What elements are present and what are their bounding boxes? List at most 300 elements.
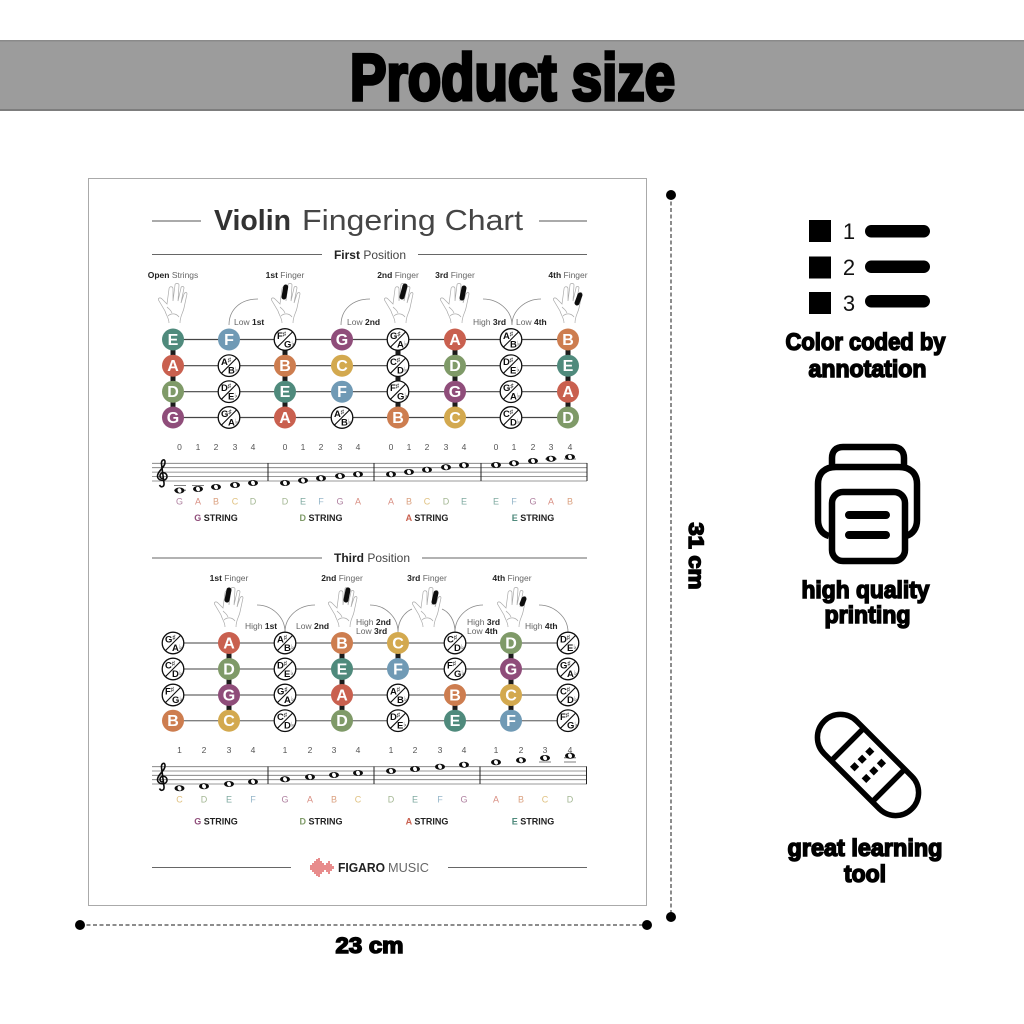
column: high 4th: G	[560, 660, 567, 672]
staff notation: first position: B	[406, 496, 412, 506]
column: open strings: B	[167, 713, 179, 730]
staff notation: third position: F	[250, 794, 256, 804]
column: low 1st: E	[228, 392, 234, 403]
column: open strings	[162, 632, 184, 732]
staff notation: first position: 1	[196, 442, 201, 452]
column: high 1st / low 2nd: ♯	[284, 634, 287, 642]
icons: hands, third position	[214, 588, 526, 627]
column: 4th finger: E	[563, 358, 574, 375]
column: low 1st: G	[221, 409, 228, 420]
staff notation: third position: 4	[251, 745, 256, 755]
column: low 2nd: G	[336, 332, 348, 349]
column: low 1st: B	[228, 366, 235, 377]
staff notation: first position: 3	[444, 442, 449, 452]
fingerboard: first position	[162, 328, 579, 428]
icon: treble clef	[158, 460, 167, 487]
column: open strings	[162, 328, 184, 428]
staff notation: third position: A	[493, 794, 499, 804]
column: low 1st: A	[221, 357, 228, 368]
column: 3rd finger: D	[449, 358, 461, 375]
column: open strings: D	[172, 669, 179, 680]
feature: great learning tool: tool	[844, 861, 886, 888]
column: high 3rd / low 4th: D	[503, 357, 510, 368]
curves and note labels: third position: High 4th	[525, 621, 558, 631]
column: 1st finger: A	[279, 410, 291, 427]
icon: sound wave	[311, 858, 333, 877]
staff notation: first position: 0	[389, 442, 394, 452]
staff notation: first position: A	[548, 496, 554, 506]
finger labels: first position: 3rd Finger	[435, 270, 475, 280]
icon: printer	[818, 447, 917, 561]
column: low 1st: ♭	[234, 393, 237, 400]
feature: color coded by annotation: Color coded by	[786, 329, 946, 356]
column: open strings: E	[168, 332, 179, 349]
column: low 1st: ♭	[235, 418, 238, 426]
column: high 1st / low 2nd: ♯	[284, 712, 287, 719]
staff notation: first position	[152, 442, 587, 523]
staff notation: third position: G STRING	[194, 816, 238, 826]
poster title: Fingering Chart	[302, 205, 523, 237]
column: high 4th: C	[560, 686, 567, 698]
column: high 1st / low 2nd: ♯	[284, 686, 288, 694]
staff notation: first position: 0	[494, 442, 499, 452]
staff notation: first position: 4	[568, 442, 573, 452]
column: 2nd finger	[387, 329, 409, 428]
column: low 2nd: A	[334, 409, 341, 420]
staff notation: third position: 2	[519, 745, 524, 755]
staff notation: third position: 3	[227, 745, 232, 755]
column: high 3rd / low 4th: ♭	[516, 367, 519, 374]
column: 3rd finger: D	[454, 643, 461, 654]
staff notation: first position: E STRING	[512, 513, 554, 523]
poster title: Violin	[214, 205, 291, 237]
staff notation: first position: 2	[531, 442, 536, 452]
staff notation: first position: C	[232, 496, 239, 506]
staff notation: first position: F	[511, 496, 517, 506]
column: 1st finger: C	[223, 713, 235, 730]
banner: product size	[0, 40, 1024, 114]
column: low 1st: A	[228, 418, 235, 428]
column: high 1st / low 2nd: ♭	[291, 696, 294, 703]
staff notation: first position: 0	[283, 442, 288, 452]
column: 4th finger: B	[562, 332, 574, 349]
finger labels: third position: 2nd Finger	[321, 573, 363, 583]
staff notation: third position: B	[331, 794, 337, 804]
finger labels: third position: 3rd Finger	[407, 573, 447, 583]
column: high 1st / low 2nd	[274, 632, 296, 732]
staff notation: third position: G	[281, 794, 289, 804]
column: 1st finger: E	[280, 384, 291, 401]
staff notation: first position: B	[567, 496, 573, 506]
column: high 3rd / low 4th: D	[510, 418, 517, 428]
column: high 1st / low 2nd: D	[277, 660, 284, 672]
column: high 4th: ♭	[574, 696, 577, 703]
column: 1st finger: ♭	[291, 340, 294, 348]
column: high 2nd / low 3rd: ♯	[397, 712, 400, 719]
column: 2nd finger: ♭	[404, 340, 407, 348]
column: 1st finger: F	[277, 331, 283, 342]
curves and note labels: third position: Low 4th	[467, 626, 498, 636]
staff notation: first position: A	[355, 496, 361, 506]
staff notation: first position: A	[195, 496, 201, 506]
column: low 1st: ♭	[235, 367, 238, 374]
column: high 3rd / low 4th: ♯	[510, 409, 513, 416]
staff notation: third position: 3	[332, 745, 337, 755]
column: low 1st: ♯	[228, 383, 231, 390]
column: open strings: A	[172, 643, 179, 654]
panel: violin fingering chart poster	[88, 178, 646, 906]
icon: numbered list: 3	[843, 291, 855, 316]
column: 4th finger: C	[505, 688, 517, 704]
column: high 4th: G	[567, 721, 574, 732]
column: 1st finger	[218, 632, 240, 732]
column: 3rd finger: G	[449, 384, 461, 401]
curves and note labels: third position: High 3rd	[467, 617, 500, 627]
staff notation: first position: F	[318, 496, 324, 506]
column: low 2nd	[331, 328, 353, 428]
icon: numbered list	[809, 219, 930, 316]
heading: third position: Third Position	[334, 551, 410, 565]
column: high 1st / low 2nd: G	[277, 686, 284, 698]
column: high 3rd / low 4th: B	[510, 340, 517, 350]
curves and note labels: third position: High 1st	[245, 621, 277, 631]
staff notation: third position: 1	[389, 745, 394, 755]
column: 1st finger: A	[223, 636, 235, 652]
column: high 4th	[557, 632, 579, 732]
finger labels: first position	[148, 270, 588, 280]
banner title: Product size	[350, 40, 675, 114]
column: 3rd finger: C	[447, 634, 454, 646]
curves and note labels: first position: Low 2nd	[347, 317, 380, 327]
column: high 2nd / low 3rd	[387, 632, 409, 732]
column: high 4th: A	[567, 669, 574, 680]
column: 4th finger: D	[505, 636, 517, 652]
column: high 2nd / low 3rd: ♭	[403, 722, 406, 729]
column: high 4th: F	[560, 712, 566, 723]
staff notation: first position: B	[213, 496, 219, 506]
staff notation: third position: 1	[494, 745, 499, 755]
column: low 1st: ♯	[228, 409, 232, 416]
finger labels: third position	[210, 573, 532, 583]
column: 3rd finger: ♯	[453, 660, 456, 668]
column: 2nd finger: A	[336, 688, 348, 704]
column: high 4th: ♯	[567, 634, 570, 642]
column: high 2nd / low 3rd: F	[393, 662, 403, 678]
column: high 2nd / low 3rd: ♯	[397, 686, 400, 694]
column: 2nd finger: F	[390, 383, 396, 394]
staff notation: first position: D	[282, 496, 289, 506]
staff notation: first position: 4	[462, 442, 467, 452]
column: 3rd finger: C	[449, 410, 461, 427]
column: high 1st / low 2nd: D	[284, 721, 291, 732]
staff notation: first position: A STRING	[406, 513, 448, 523]
column: 2nd finger: ♯	[397, 357, 400, 364]
column: high 3rd / low 4th: ♯	[510, 331, 513, 338]
column: 2nd finger: B	[392, 410, 404, 427]
column: high 1st / low 2nd: A	[284, 695, 291, 706]
staff notation: third position: 2	[308, 745, 313, 755]
staff notation: third position	[152, 745, 587, 826]
dimension: height 31 cm: 31 cm	[684, 522, 707, 590]
footer logo: figaro music	[152, 858, 587, 877]
column: 2nd finger	[331, 632, 353, 732]
column: high 3rd / low 4th: ♭	[517, 340, 520, 348]
staff notation: first position: 3	[338, 442, 343, 452]
column: 4th finger: G	[505, 662, 517, 678]
finger labels: first position: 2nd Finger	[377, 270, 419, 280]
column: 4th finger: F	[506, 713, 516, 730]
staff notation: first position: D	[443, 496, 450, 506]
staff notation: first position: 0	[177, 442, 182, 452]
column: high 4th: ♭	[574, 670, 577, 677]
staff notation: third position: 2	[413, 745, 418, 755]
dimension: width 23 cm	[75, 920, 652, 958]
staff notation: first position: 4	[251, 442, 256, 452]
staff notation: third position: E STRING	[512, 816, 554, 826]
feature: color coded by annotation: annotation	[808, 356, 926, 383]
column: open strings: D	[167, 384, 179, 401]
staff notation: first position: 2	[319, 442, 324, 452]
staff notation: third position: C	[176, 794, 183, 804]
column: high 4th: ♯	[567, 660, 571, 668]
column: 4th finger: A	[562, 384, 574, 401]
column: high 4th: D	[560, 634, 567, 646]
icon: numbered list: 1	[843, 219, 855, 244]
finger labels: third position: 4th Finger	[492, 573, 532, 583]
column: open strings: ♯	[172, 634, 176, 642]
column: open strings: A	[167, 358, 179, 375]
curves and note labels: third position: Low 2nd	[296, 621, 329, 631]
staff notation: first position: E	[300, 496, 306, 506]
column: 1st finger: G	[284, 340, 291, 350]
column: high 1st / low 2nd: ♭	[290, 670, 293, 677]
column: open strings: ♭	[179, 644, 182, 651]
column: high 3rd / low 4th: ♯	[510, 383, 514, 390]
staff notation: first position: A	[388, 496, 394, 506]
column: 2nd finger: A	[397, 340, 404, 350]
column: high 1st / low 2nd: ♯	[284, 660, 287, 668]
column: high 4th: E	[567, 643, 573, 654]
column: open strings: ♯	[171, 686, 174, 694]
column: high 4th: ♯	[566, 712, 569, 719]
icon: treble clef	[158, 763, 167, 790]
column: 3rd finger	[444, 632, 466, 732]
column: low 2nd: ♭	[348, 418, 351, 426]
column: 3rd finger: E	[450, 713, 461, 730]
column: 2nd finger: E	[337, 662, 348, 678]
column: 4th finger	[557, 328, 579, 428]
staff notation: first position: C	[424, 496, 431, 506]
icon: numbered list: 2	[843, 255, 855, 280]
staff notation: first position: D	[250, 496, 257, 506]
staff notation: third position: E	[412, 794, 418, 804]
column: high 2nd / low 3rd: D	[390, 712, 397, 723]
column: 2nd finger: D	[397, 366, 404, 377]
dimension: width 23 cm: 23 cm	[336, 933, 404, 958]
column: high 1st / low 2nd: ♭	[291, 722, 294, 729]
staff notation: third position: 3	[438, 745, 443, 755]
column: high 3rd / low 4th	[500, 329, 522, 428]
column: high 3rd / low 4th: ♭	[517, 393, 520, 400]
feature: high quality printing	[802, 447, 930, 629]
feature: great learning tool: great learning	[788, 835, 942, 862]
staff notation: first position: 1	[407, 442, 412, 452]
staff notation: third position: D	[567, 794, 574, 804]
column: high 2nd / low 3rd: E	[397, 721, 403, 732]
column: 1st finger: B	[279, 358, 291, 375]
staff notation: first position: E	[493, 496, 499, 506]
column: open strings: G	[165, 634, 172, 646]
column: 2nd finger: ♭	[404, 367, 407, 374]
column: open strings: F	[165, 686, 171, 698]
column: 2nd finger: B	[336, 636, 348, 652]
staff notation: first position: D STRING	[299, 513, 343, 523]
finger labels: first position: Open Strings	[148, 270, 198, 280]
column: 2nd finger: ♯	[397, 331, 401, 338]
curves and note labels: first position	[229, 299, 547, 327]
staff notation: third position: D	[201, 794, 208, 804]
column: high 4th: ♯	[567, 686, 570, 694]
curves and note labels: third position: Low 3rd	[356, 626, 387, 636]
staff notation: third position: A STRING	[406, 816, 448, 826]
finger labels: first position: 4th Finger	[548, 270, 588, 280]
staff notation: third position: A	[307, 794, 313, 804]
column: high 3rd / low 4th: G	[503, 383, 510, 394]
staff notation: first position: 2	[425, 442, 430, 452]
staff notation: third position: D STRING	[299, 816, 343, 826]
column: high 2nd / low 3rd: B	[397, 695, 404, 706]
column: low 1st: ♯	[228, 357, 231, 364]
column: 3rd finger	[444, 328, 466, 428]
column: 2nd finger: ♯	[396, 383, 399, 390]
column: 3rd finger: G	[454, 669, 461, 680]
column: 1st finger: D	[223, 662, 235, 678]
staff notation: third position: 1	[283, 745, 288, 755]
column: 3rd finger: A	[449, 332, 461, 349]
column: high 2nd / low 3rd: A	[390, 686, 397, 698]
staff notation: third position: C	[542, 794, 549, 804]
column: open strings: C	[165, 660, 172, 672]
feature: color coded by annotation	[786, 219, 946, 383]
column: low 2nd: ♯	[341, 409, 344, 416]
column: high 1st / low 2nd: C	[277, 712, 284, 723]
staff notation: first position: 3	[549, 442, 554, 452]
staff notation: third position: C	[355, 794, 362, 804]
column: 4th finger: D	[562, 410, 574, 427]
footer logo: figaro music: MUSIC	[388, 860, 429, 875]
staff notation: third position: B	[518, 794, 524, 804]
finger labels: third position: 1st Finger	[210, 573, 249, 583]
column: high 3rd / low 4th: E	[510, 366, 516, 377]
staff notation: third position: 2	[202, 745, 207, 755]
column: 3rd finger: ♭	[461, 670, 464, 677]
column: high 4th: D	[567, 695, 574, 706]
column: 2nd finger: ♭	[404, 393, 407, 400]
icons: hands, first position	[158, 284, 582, 323]
staff notation: third position: 3	[543, 745, 548, 755]
staff notation: third position: E	[226, 794, 232, 804]
column: low 2nd: B	[341, 418, 348, 428]
column: 1st finger: G	[223, 688, 235, 704]
column: high 4th: ♭	[574, 722, 577, 729]
staff notation: third position: D	[388, 794, 395, 804]
curves and note labels: third position: High 2nd	[356, 617, 391, 627]
feature: high quality printing: printing	[824, 602, 910, 629]
staff notation: third position: 1	[177, 745, 182, 755]
column: 2nd finger: D	[336, 713, 348, 730]
feature: great learning tool	[788, 705, 942, 888]
column: high 3rd / low 4th: ♯	[510, 357, 513, 364]
column: high 3rd / low 4th: C	[503, 409, 510, 420]
staff notation: third position: 4	[356, 745, 361, 755]
dimension: height 31 cm	[666, 190, 707, 922]
column: 2nd finger: C	[390, 357, 397, 368]
column: high 1st / low 2nd: ♭	[291, 644, 294, 651]
staff notation: third position: 4	[568, 745, 573, 755]
poster title	[152, 205, 587, 237]
column: high 2nd / low 3rd: ♭	[404, 696, 407, 703]
staff notation: first position: 4	[356, 442, 361, 452]
column: open strings: ♭	[179, 670, 182, 677]
column: high 1st / low 2nd: B	[284, 643, 291, 654]
column: high 1st / low 2nd: E	[284, 669, 290, 680]
column: high 2nd / low 3rd: C	[392, 636, 404, 652]
column: 1st finger	[274, 329, 296, 428]
curves and note labels: first position: High 3rd	[473, 317, 506, 327]
column: high 3rd / low 4th: ♭	[517, 418, 520, 426]
curves and note labels: first position: Low 4th	[516, 317, 547, 327]
column: low 2nd: F	[337, 384, 347, 401]
heading: first position: First Position	[334, 248, 406, 262]
column: low 1st	[218, 328, 240, 428]
staff notation: third position: G	[460, 794, 468, 804]
column: 3rd finger: F	[447, 660, 453, 672]
staff notation: first position: E	[461, 496, 467, 506]
feature: high quality printing: high quality	[802, 577, 930, 604]
column: 3rd finger: B	[449, 688, 461, 704]
staff notation: first position: G	[529, 496, 537, 506]
column: high 1st / low 2nd: A	[277, 634, 284, 646]
staff notation: first position: 2	[214, 442, 219, 452]
staff notation: first position: 1	[512, 442, 517, 452]
column: open strings: ♯	[172, 660, 175, 668]
column: open strings: ♭	[179, 696, 182, 703]
finger labels: first position: 1st Finger	[266, 270, 305, 280]
curves and note labels: first position: Low 1st	[234, 317, 264, 327]
column: low 1st: D	[221, 383, 228, 394]
column: 3rd finger: ♯	[454, 634, 457, 642]
staff notation: first position: G STRING	[194, 513, 238, 523]
column: low 1st: F	[224, 332, 234, 349]
column: 3rd finger: ♭	[461, 644, 464, 651]
staff notation: third position: F	[437, 794, 443, 804]
column: low 2nd: C	[336, 358, 348, 375]
curves and note labels: third position	[245, 605, 568, 636]
staff notation: first position: 3	[233, 442, 238, 452]
staff notation: first position: G	[336, 496, 344, 506]
column: 1st finger: ♯	[283, 331, 286, 338]
column: 2nd finger: G	[390, 331, 397, 342]
column: open strings: G	[167, 410, 179, 427]
icon: bandage	[808, 705, 928, 825]
fingerboard: third position	[162, 632, 579, 732]
column: high 3rd / low 4th: A	[503, 331, 510, 342]
column: high 3rd / low 4th: A	[510, 392, 517, 403]
column: 2nd finger: G	[397, 392, 404, 403]
column: open strings: G	[172, 695, 179, 706]
column: 4th finger	[500, 632, 522, 732]
staff notation: first position: 1	[301, 442, 306, 452]
